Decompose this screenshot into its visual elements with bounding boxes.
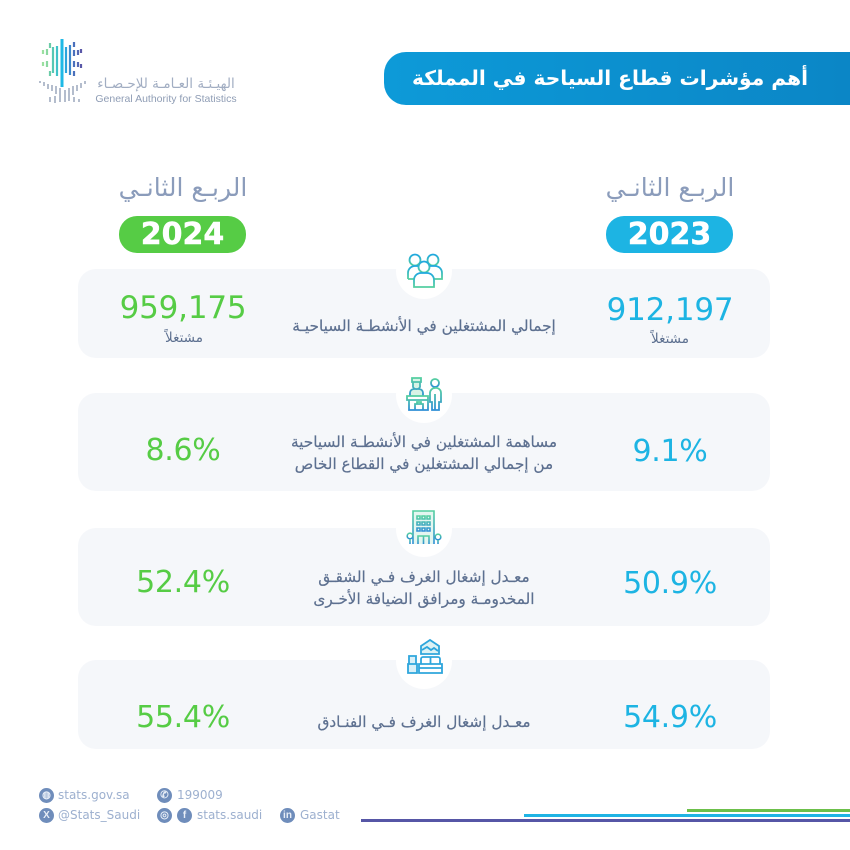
contact phone bbox=[157, 788, 223, 803]
logo mark bbox=[39, 39, 86, 103]
contact phone: ✆ bbox=[160, 790, 169, 801]
value 2024 employed: 959,175 bbox=[120, 290, 246, 326]
panel: total employed bbox=[78, 269, 770, 358]
footer contacts bbox=[39, 788, 340, 823]
contact instagram facebook: f bbox=[183, 810, 186, 821]
icon: apartment building bbox=[406, 510, 442, 544]
title banner bbox=[384, 52, 850, 105]
contact instagram facebook: ◎ bbox=[160, 810, 169, 821]
contact instagram facebook bbox=[157, 808, 262, 823]
title: أهم مؤشرات قطاع السياحة في المملكة bbox=[412, 66, 808, 90]
logo text: General Authority for Statistics bbox=[95, 93, 237, 105]
value 2024 hotels: 55.4% bbox=[136, 700, 230, 735]
contact linkedin: in bbox=[283, 810, 292, 821]
quarter label 2023: الربـع الثانـي bbox=[606, 173, 734, 202]
label hotels: معـدل إشغال الغرف فـي الفنـادق bbox=[317, 713, 531, 731]
panel: apartments occupancy bbox=[78, 528, 770, 626]
contact phone: 199009 bbox=[177, 788, 223, 802]
label employed: إجمالي المشتغلين في الأنشطـة السياحيـة bbox=[292, 317, 556, 335]
icon: people bbox=[407, 254, 443, 288]
contact linkedin bbox=[280, 808, 340, 823]
label contribution bbox=[291, 432, 557, 473]
icon: reception desk bbox=[406, 377, 442, 411]
year pill 2024 bbox=[119, 216, 246, 253]
icon: hotel bed bbox=[407, 638, 443, 674]
label apartments: معـدل إشغال الغرف فـي الشقـق bbox=[318, 568, 530, 586]
contact linkedin: Gastat bbox=[300, 808, 340, 822]
contact website: stats.gov.sa bbox=[58, 788, 130, 802]
year pill 2023: 2023 bbox=[628, 217, 711, 252]
label apartments bbox=[313, 568, 535, 608]
year pill 2024: 2024 bbox=[141, 217, 224, 252]
column header 2024 bbox=[119, 173, 247, 253]
logo text: الهيـئـة العـامـة للإحـصـاء bbox=[97, 76, 235, 92]
logo bbox=[39, 39, 237, 105]
contact instagram facebook: stats.saudi bbox=[197, 808, 262, 822]
value 2023 employed: 912,197 bbox=[607, 292, 733, 328]
contact x: @Stats_Saudi bbox=[58, 808, 140, 822]
column header 2023 bbox=[606, 173, 734, 253]
panel: hotel occupancy bbox=[78, 660, 770, 749]
value 2023 hotels: 54.9% bbox=[623, 700, 717, 735]
label apartments: المخدومـة ومرافق الضيافة الأخـرى bbox=[313, 590, 535, 608]
unit 2023 employed: مشتغلاً bbox=[651, 331, 689, 347]
footer lines bbox=[361, 809, 850, 822]
logo text bbox=[95, 76, 237, 105]
value 2024 apartments: 52.4% bbox=[136, 565, 230, 600]
unit 2024 employed: مشتغلاً bbox=[165, 330, 203, 346]
label contribution: من إجمالي المشتغلين في القطاع الخاص bbox=[295, 455, 553, 473]
panel: contribution bbox=[78, 393, 770, 491]
value 2024 contribution: 8.6% bbox=[145, 433, 221, 468]
value 2023 contribution: 9.1% bbox=[632, 434, 708, 469]
year pill 2023 bbox=[606, 216, 733, 253]
quarter label 2024: الربـع الثانـي bbox=[119, 173, 247, 202]
contact website: ◍ bbox=[42, 790, 51, 801]
contact x: X bbox=[43, 810, 50, 821]
value 2023 apartments: 50.9% bbox=[623, 566, 717, 601]
label contribution: مساهمة المشتغلين في الأنشطـة السياحية bbox=[291, 433, 557, 451]
